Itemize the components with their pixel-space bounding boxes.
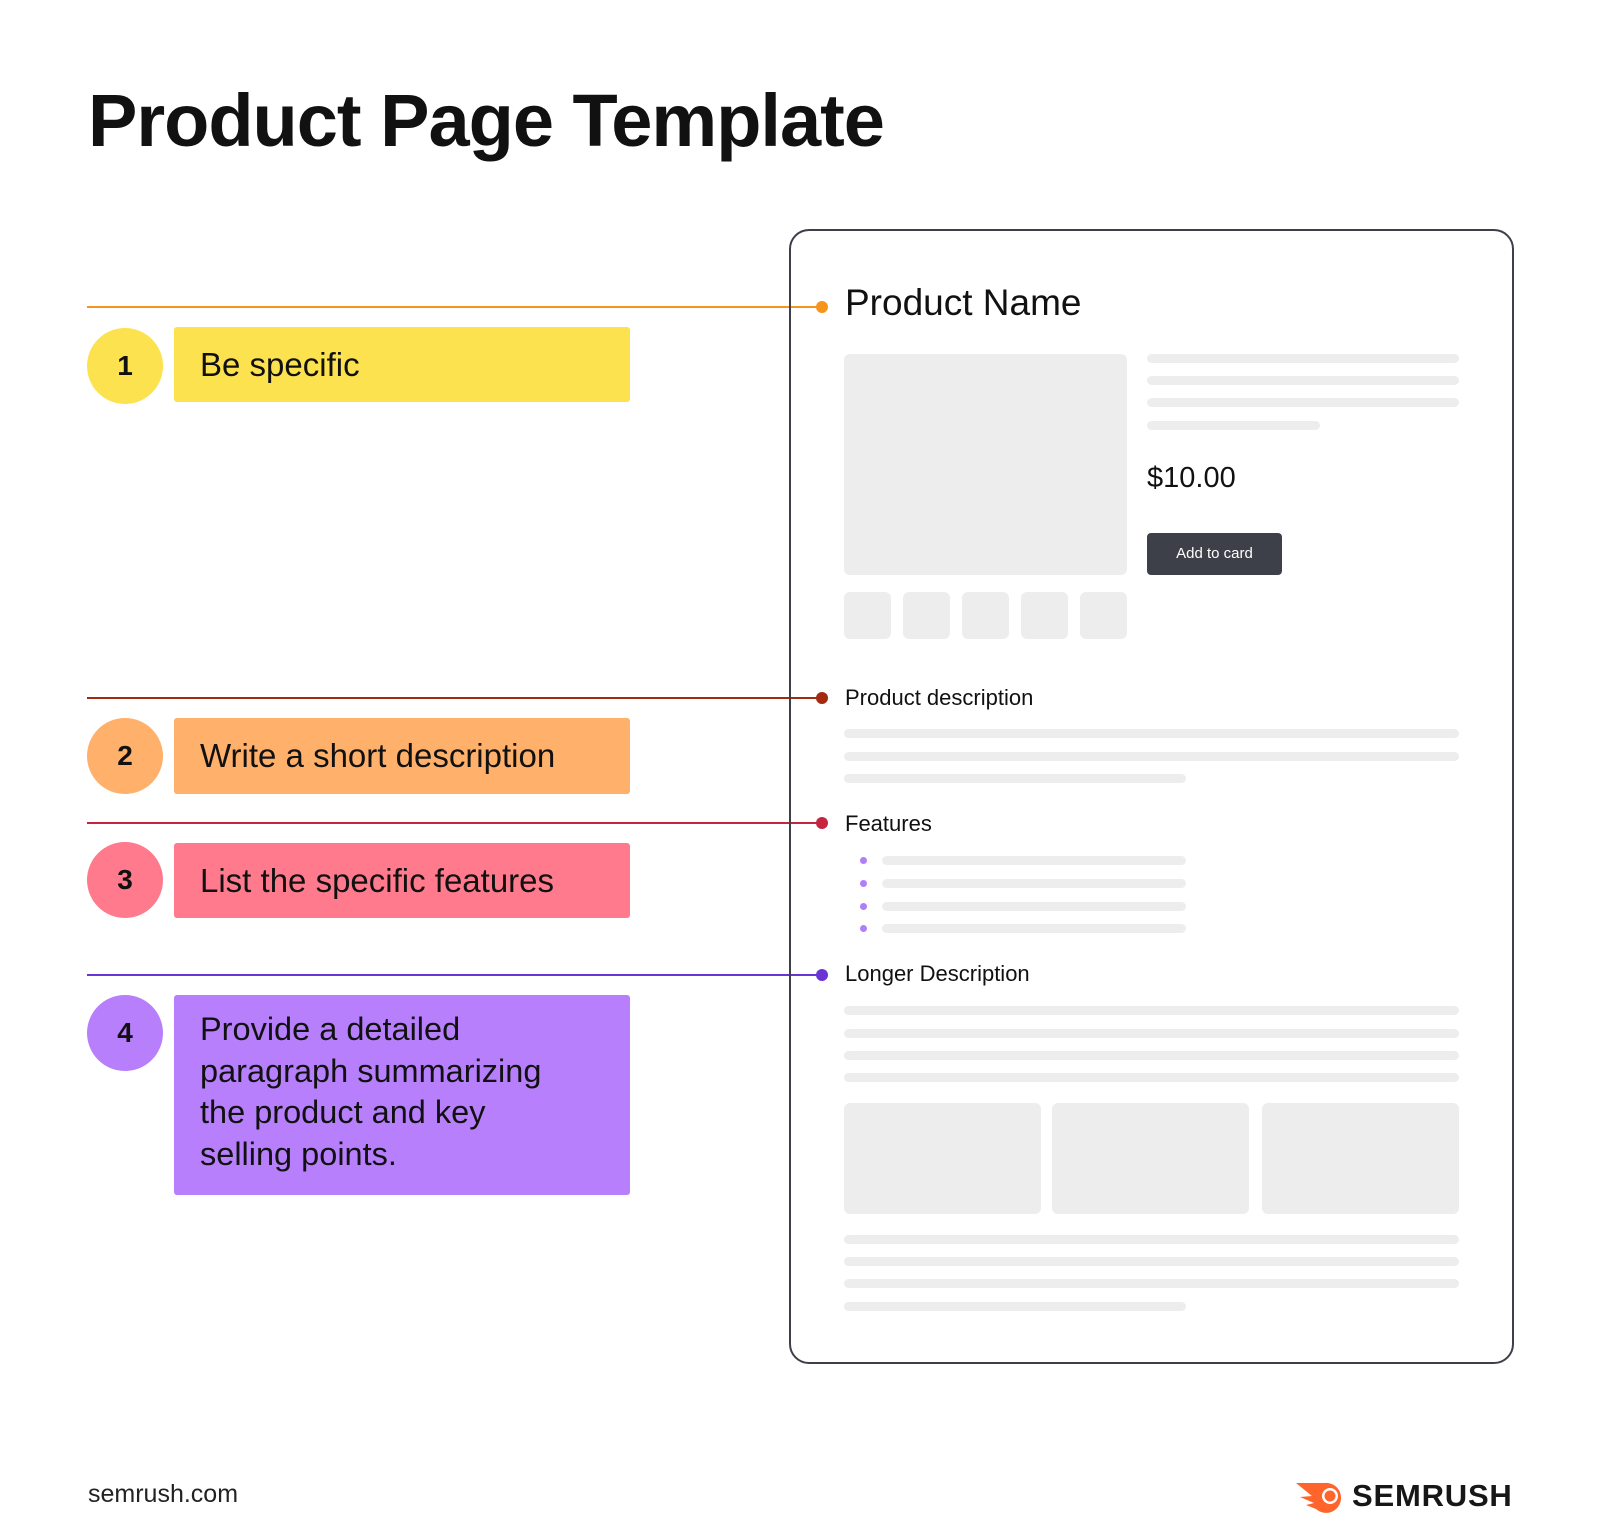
- step 2 box: Write a short description: [200, 737, 555, 774]
- dot 4: [816, 969, 828, 981]
- step 1 circle: [87, 328, 163, 404]
- connector line 2: [87, 697, 822, 699]
- feature bullet list: [860, 856, 1186, 933]
- main image placeholder: [844, 354, 1127, 575]
- image gallery placeholders: [844, 1103, 1459, 1214]
- step 4 box: paragraph summarizing: [200, 1052, 541, 1088]
- step 3 circle: [87, 842, 163, 918]
- step 4 box: selling points.: [200, 1136, 397, 1172]
- thumbnails: [844, 592, 1127, 639]
- step 3 box: List the specific features: [200, 862, 554, 899]
- description lines: [844, 729, 1459, 783]
- bottom lines: [844, 1235, 1459, 1311]
- longer description lines: [844, 1006, 1459, 1082]
- connector line 1: [87, 306, 822, 308]
- summary lines: [1147, 354, 1459, 430]
- dot 1: [816, 301, 828, 313]
- step 4 box: Provide a detailed: [200, 1011, 460, 1047]
- panel: product page mockup: [789, 229, 1514, 1364]
- step 1 circle: 1: [117, 350, 133, 381]
- footer url: semrush.com: [88, 1480, 238, 1508]
- step 2 box: [174, 718, 630, 794]
- connector line 4: [87, 974, 822, 976]
- step 2 circle: 2: [117, 740, 133, 771]
- longer description label: Longer Description: [845, 961, 1030, 986]
- logo: semrush: [1296, 1478, 1513, 1513]
- step 3 box: [174, 843, 630, 918]
- dot 3: [816, 817, 828, 829]
- step 4 circle: [87, 995, 163, 1071]
- add to cart button: [1147, 533, 1282, 575]
- add to cart button: Add to card: [1176, 545, 1253, 562]
- step 4 box: the product and key: [200, 1094, 485, 1130]
- step 4 circle: 4: [117, 1017, 133, 1048]
- product description label: Product description: [845, 685, 1033, 710]
- step 4 box: [174, 995, 630, 1195]
- logo text: SEMRUSH: [1352, 1478, 1513, 1513]
- step 2 circle: [87, 718, 163, 794]
- step 1 box: [174, 327, 630, 402]
- features label: Features: [845, 811, 932, 836]
- step 1 box: Be specific: [200, 346, 360, 383]
- icon: fireball: [1296, 1482, 1342, 1513]
- step 3 circle: 3: [117, 864, 133, 895]
- product name: Product Name: [845, 282, 1082, 323]
- dot 2: [816, 692, 828, 704]
- title: Product Page Template: [88, 79, 884, 162]
- connector line 3: [87, 822, 822, 824]
- price: $10.00: [1147, 462, 1236, 494]
